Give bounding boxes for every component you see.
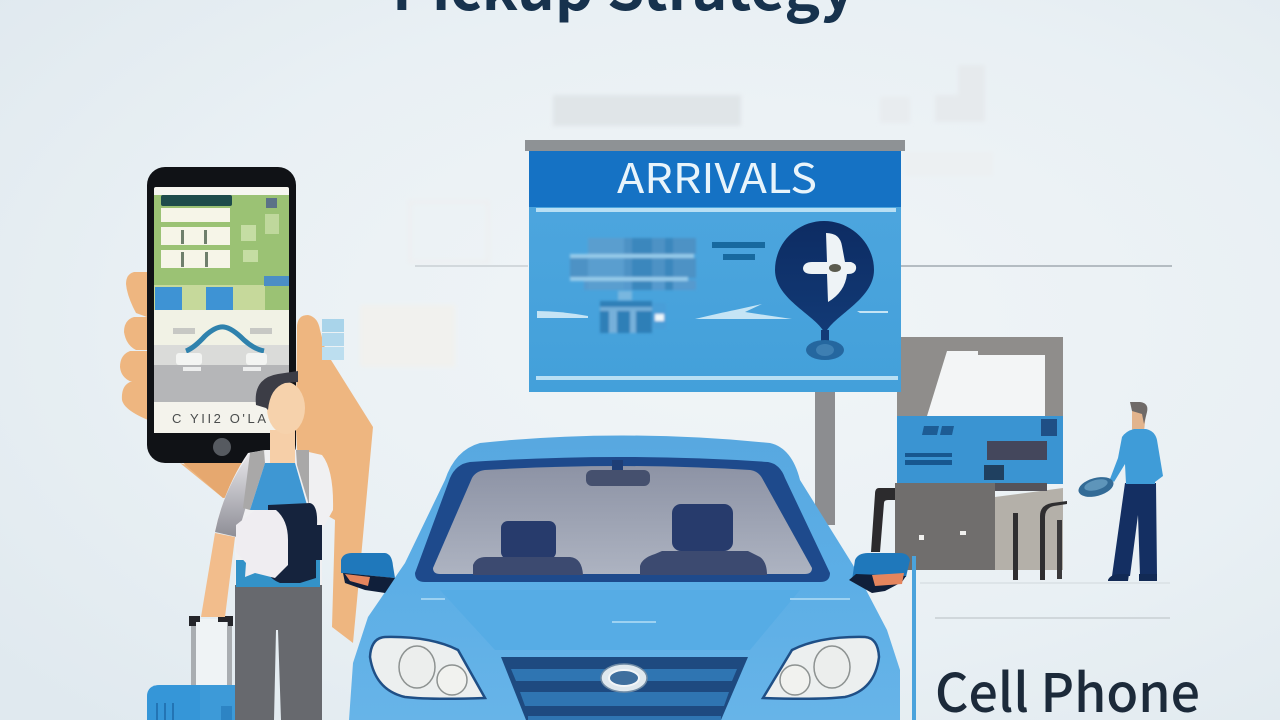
- windshield glass: [433, 466, 812, 574]
- sign post: [815, 390, 835, 525]
- phone screen: [154, 187, 289, 433]
- car emblem: [601, 664, 647, 692]
- head: [267, 382, 305, 434]
- traveler: [201, 371, 333, 720]
- white bag: [236, 510, 288, 578]
- horizon line: [415, 265, 1172, 267]
- neck: [270, 430, 295, 463]
- screen side items: [266, 198, 277, 208]
- left side mirror: [341, 553, 395, 593]
- right headlight: [763, 637, 879, 699]
- home button: [213, 438, 231, 456]
- screen labels: [173, 328, 195, 334]
- suitcase body: [147, 685, 243, 720]
- left headlight: [370, 637, 485, 699]
- arrivals sign: [525, 140, 905, 392]
- right seat: [640, 504, 767, 575]
- airport kiosk: [871, 337, 1067, 580]
- hand holding phone: [120, 272, 373, 643]
- thumb and forearm: [180, 315, 373, 643]
- airplane glyph: [803, 233, 856, 302]
- dashes: [712, 242, 765, 248]
- grille: [501, 657, 748, 720]
- fingers: [126, 272, 147, 317]
- screen header: [161, 195, 232, 206]
- blue thin cable: [912, 556, 916, 720]
- torso: [1110, 429, 1163, 484]
- windshield frame: [415, 457, 830, 582]
- sign top bar: [525, 140, 905, 151]
- hair: [256, 371, 298, 410]
- smartphone: [147, 167, 296, 463]
- suitcase: [147, 616, 243, 720]
- dark bag: [268, 503, 322, 583]
- blurred background shapes: [360, 65, 993, 367]
- screen tables: [161, 208, 230, 222]
- right side mirror: [849, 553, 910, 593]
- kiosk frame: [897, 337, 1063, 419]
- rear-view mirror: [586, 460, 650, 486]
- clouds: [537, 311, 588, 318]
- airport pin: [775, 221, 874, 360]
- sign heading: ARRIVALS: [617, 145, 817, 205]
- vest: [250, 463, 307, 510]
- car body: [349, 436, 900, 720]
- screen arch: [186, 327, 264, 351]
- shirt: [214, 450, 333, 585]
- kiosk window: [927, 351, 1045, 416]
- arm: [201, 533, 235, 617]
- screen pickup pads: [176, 353, 202, 365]
- trousers: [235, 583, 322, 720]
- left seat: [473, 521, 583, 575]
- kiosk screen: [897, 416, 1063, 484]
- screen text: C YII2 O'LA: [172, 411, 266, 426]
- head: [1132, 410, 1146, 432]
- sign body: [529, 151, 901, 392]
- kiosk chair and stools: [871, 488, 895, 552]
- shoulder straps: [243, 450, 309, 510]
- ground lines: [920, 582, 1170, 619]
- faint blue tiles: [322, 319, 344, 360]
- sleeve: [215, 452, 262, 537]
- sign header: [529, 151, 901, 207]
- screen blue squares: [155, 287, 182, 310]
- trousers: [1112, 483, 1157, 576]
- blue car: [341, 436, 910, 720]
- standing man: [1076, 402, 1163, 581]
- blurred departures board: [570, 238, 696, 333]
- bowl: [1076, 474, 1116, 500]
- kiosk counter: [895, 483, 995, 570]
- suitcase handle: [192, 619, 232, 685]
